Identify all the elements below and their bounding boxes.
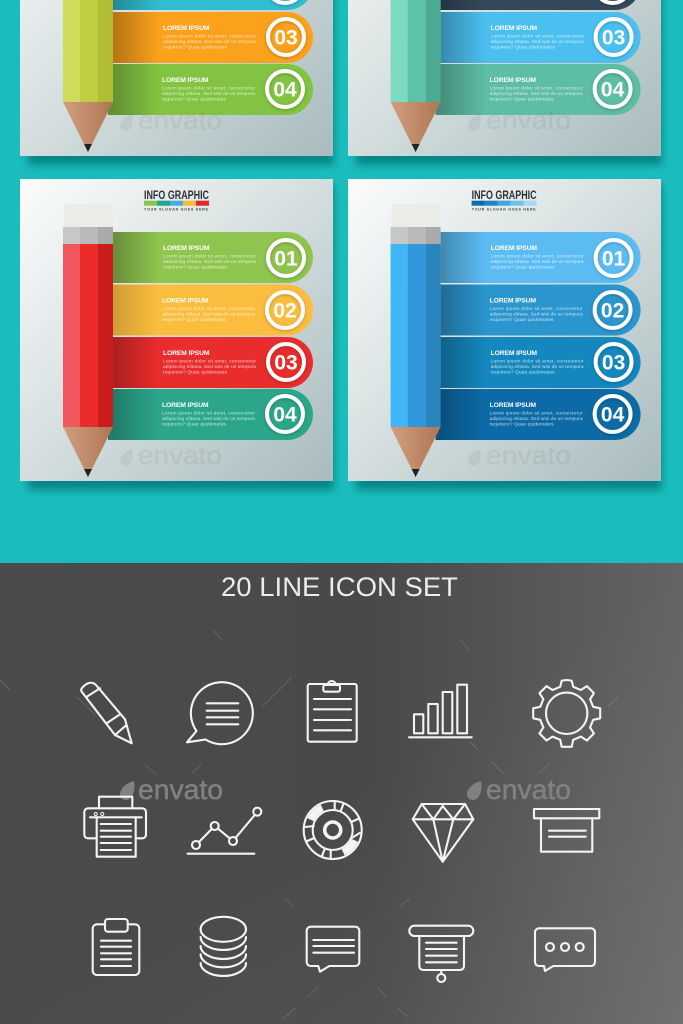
band 04 green	[108, 64, 313, 115]
band 04 dark blue: Lorem ipsum dolor sit amet, consectetur	[490, 410, 583, 416]
pencil: blue	[391, 204, 441, 477]
band 01 light blue: adipiscing elitasa. Sed wisi de us tempura	[491, 259, 584, 265]
band 03 blue: LOREM IPSUM	[491, 350, 537, 357]
band 03 red: LOREM IPSUM	[163, 350, 210, 357]
watermark: dark panel right: envato	[486, 774, 571, 805]
band 03 red: 03	[274, 352, 298, 374]
band 04 green: adipiscing elitasa. Sed wisi de us tempura	[162, 91, 255, 97]
watermark: bottom left card: envato	[138, 440, 222, 470]
band 01 light blue: requirere? Quae quidemates	[491, 264, 555, 270]
band 04 dark blue: adipiscing elitasa. Sed wisi de us tempura	[490, 416, 583, 422]
watermark: top left card: envato	[138, 105, 222, 135]
pencil: lime	[63, 0, 113, 152]
band 03 red: adipiscing elitasa. Sed wisi de us tempura	[163, 364, 256, 370]
band 01 green: adipiscing elitasa. Sed wisi de us tempura	[163, 259, 256, 265]
band 02 medium blue	[441, 284, 641, 336]
icon: projector screen	[409, 926, 473, 982]
band 03 orange: adipiscing elitasa. Sed wisi de us tempura	[163, 39, 256, 45]
heading: info graphic	[144, 190, 209, 212]
band 02 medium blue: adipiscing elitasa. Sed wisi de us tempura	[490, 312, 583, 318]
panel: dark icon section	[0, 563, 683, 1024]
band 03 red: requirere? Quae quidemates	[163, 370, 228, 376]
band 02 yellow: LOREM IPSUM	[162, 298, 209, 304]
icon: database stack	[201, 917, 246, 976]
panel: bottom left card	[20, 179, 334, 490]
icon: gear	[533, 680, 600, 747]
band 04 green: LOREM IPSUM	[162, 77, 209, 84]
band 03 orange: Lorem ipsum dolor sit amet, consectetur	[163, 34, 256, 40]
panel: bottom right card	[348, 179, 662, 490]
band 03 orange: requirere? Quae quidemates	[163, 44, 228, 50]
band 03 sky blue: Lorem ipsum dolor sit amet, consectetur	[491, 34, 584, 40]
band 04 green: 04	[273, 78, 297, 102]
band 02 medium blue: 02	[601, 300, 624, 322]
icon: speech bubble	[187, 682, 253, 744]
band 03 blue	[441, 337, 641, 388]
band 01 light blue: LOREM IPSUM	[491, 245, 537, 252]
band 03 blue: requirere? Quae quidemates	[491, 370, 555, 376]
icon: clipboard small	[93, 919, 139, 975]
band 04 teal green: adipiscing elitasa. Sed wisi de us tempura	[162, 416, 255, 422]
band 04 sea green: LOREM IPSUM	[490, 77, 536, 84]
band 03 blue: 03	[602, 352, 625, 374]
band 04 dark blue: requirere? Quae quidemates	[490, 422, 554, 428]
band 04 dark blue	[436, 389, 641, 440]
icon: archive box	[534, 809, 599, 852]
band 03 orange: 03	[274, 26, 298, 50]
band 03 sky blue: adipiscing elitasa. Sed wisi de us tempura	[491, 39, 584, 45]
heading: info graphic blue: INFO GRAPHIC	[472, 190, 537, 202]
teal background	[0, 0, 683, 563]
icon: message box	[307, 927, 359, 972]
band 02 yellow	[113, 284, 313, 336]
band 03 sky blue: 03	[602, 26, 625, 50]
icon: target chip	[304, 801, 362, 859]
icon: bar chart	[409, 685, 472, 737]
heading: info graphic: INFO GRAPHIC	[144, 190, 209, 202]
pencil: mint	[391, 0, 441, 152]
band 04 green: Lorem ipsum dolor sit amet, consectetur	[162, 86, 255, 92]
band 04 sea green	[436, 64, 641, 115]
icon: diamond	[413, 804, 473, 862]
icon: line chart	[188, 808, 261, 854]
heading: info graphic blue	[472, 190, 537, 212]
band 03 red: Lorem ipsum dolor sit amet, consectetur	[163, 358, 256, 364]
watermark: top right card: envato	[486, 105, 571, 135]
band 02 teal	[113, 0, 313, 10]
heading: info graphic: YOUR SLOGAN GOES HERE	[144, 208, 209, 212]
icon: printer	[84, 797, 146, 857]
band 02 medium blue: requirere? Quae quidemates	[490, 317, 554, 323]
icon: clipboard	[308, 681, 357, 742]
band 02 medium blue: Lorem ipsum dolor sit amet, consectetur	[490, 306, 583, 312]
band 04 dark blue: 04	[601, 404, 625, 426]
band 01 light blue: Lorem ipsum dolor sit amet, consectetur	[491, 254, 584, 260]
band 04 dark blue: LOREM IPSUM	[490, 402, 536, 409]
heading: 20 line icon set: 20 LINE ICON SET	[221, 572, 458, 602]
band 04 sea green: adipiscing elitasa. Sed wisi de us tempura	[490, 91, 583, 97]
pencil: red	[63, 204, 113, 477]
band 02 yellow: requirere? Quae quidemates	[162, 317, 227, 323]
watermark: bottom right card: envato	[486, 440, 571, 470]
band 02 yellow: Lorem ipsum dolor sit amet, consectetur	[162, 306, 255, 312]
band 03 sky blue: LOREM IPSUM	[491, 25, 537, 32]
band 01 light blue: 01	[602, 248, 626, 270]
icon: pencil	[81, 683, 132, 743]
band 01 green	[113, 232, 313, 283]
band 03 orange: LOREM IPSUM	[163, 25, 210, 32]
band 01 green: Lorem ipsum dolor sit amet, consectetur	[163, 254, 256, 260]
band 02 yellow: 02	[273, 300, 297, 322]
band 02 medium blue: LOREM IPSUM	[490, 298, 536, 304]
band 04 teal green: 04	[273, 404, 297, 426]
band 02 navy	[441, 0, 641, 10]
panel: top right card	[348, 0, 662, 165]
band 01 green: 01	[274, 248, 298, 270]
watermark: dark panel left: envato	[138, 774, 223, 805]
band 03 sky blue: requirere? Quae quidemates	[491, 44, 555, 50]
band 04 teal green: requirere? Quae quidemates	[162, 422, 227, 428]
band 04 sea green: 04	[601, 78, 625, 102]
band 04 teal green: LOREM IPSUM	[162, 402, 209, 409]
band 03 sky blue	[441, 12, 641, 63]
band 04 teal green: Lorem ipsum dolor sit amet, consectetur	[162, 410, 255, 416]
band 03 blue: Lorem ipsum dolor sit amet, consectetur	[491, 358, 584, 364]
panel: top left card	[20, 0, 334, 165]
band 04 teal green	[108, 389, 313, 440]
band 04 sea green: Lorem ipsum dolor sit amet, consectetur	[490, 86, 583, 92]
band 02 yellow: adipiscing elitasa. Sed wisi de us tempura	[162, 312, 255, 318]
band 03 red	[113, 337, 313, 388]
band 01 green: LOREM IPSUM	[163, 245, 210, 252]
icon: chat dots	[535, 928, 595, 971]
heading: info graphic blue: YOUR SLOGAN GOES HERE	[472, 208, 536, 212]
band 01 green: requirere? Quae quidemates	[163, 264, 228, 270]
band 03 orange	[113, 12, 313, 63]
band 01 light blue	[441, 232, 641, 283]
band 04 green: requirere? Quae quidemates	[162, 96, 227, 102]
band 04 sea green: requirere? Quae quidemates	[490, 96, 554, 102]
band 03 blue: adipiscing elitasa. Sed wisi de us tempura	[491, 364, 584, 370]
